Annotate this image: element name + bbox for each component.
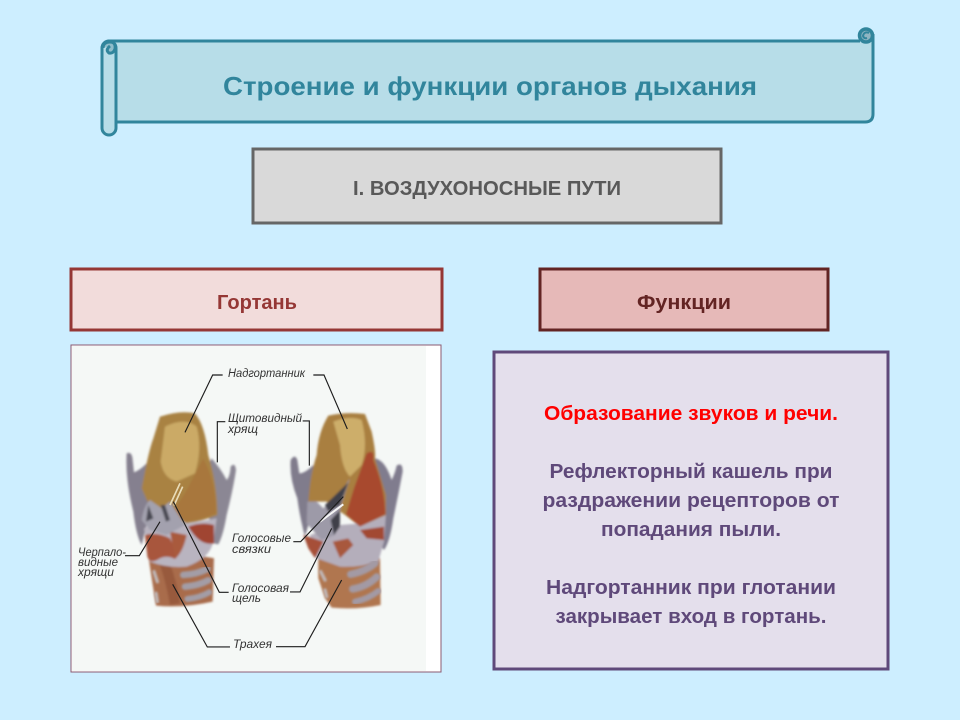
larynx drawing: right view: [276, 375, 403, 647]
section box: air passages: I. ВОЗДУХОНОСНЫЕ ПУТИ: [353, 178, 621, 200]
illustration labels: Щитовидный: [228, 413, 303, 425]
heading box: functions: Функции: [637, 292, 731, 314]
section box: air passages: [253, 149, 721, 223]
red statement: Образование звуков и речи.: [544, 403, 838, 425]
heading box: larynx: [71, 269, 442, 330]
illustration: larynx anatomy: [71, 345, 441, 672]
illustration labels: Трахея: [233, 639, 272, 651]
reflex cough text: [542, 461, 840, 541]
illustration labels: хрящи: [77, 567, 115, 579]
illustration labels: щель: [232, 593, 261, 605]
title: Строение и функции органов дыхания: [223, 71, 757, 101]
illustration labels: [77, 368, 306, 651]
epiglottis text: закрывает вход в гортань.: [556, 606, 826, 628]
reflex cough text: раздражении рецепторов от: [542, 490, 840, 512]
illustration labels: связки: [232, 544, 272, 556]
epiglottis text: Надгортанник при глотании: [546, 577, 836, 599]
heading box: larynx: Гортань: [217, 292, 297, 314]
reflex cough text: попадания пыли.: [601, 519, 781, 541]
illustration labels: хрящ: [227, 424, 258, 436]
illustration labels: Голосовые: [232, 533, 291, 545]
illustration labels: Черпало-: [78, 547, 126, 559]
larynx drawing: left view: [125, 375, 236, 647]
illustration labels: видные: [78, 557, 118, 569]
epiglottis text: [546, 577, 836, 628]
title banner: scroll: [102, 29, 873, 135]
heading box: functions: [540, 269, 828, 330]
tracheal rings: [321, 563, 378, 602]
reflex cough text: Рефлекторный кашель при: [550, 461, 832, 483]
panel: functions text: [494, 352, 888, 669]
illustration labels: Голосовая: [232, 583, 289, 595]
tracheal rings: [154, 569, 209, 602]
illustration labels: Надгортанник: [228, 368, 306, 380]
